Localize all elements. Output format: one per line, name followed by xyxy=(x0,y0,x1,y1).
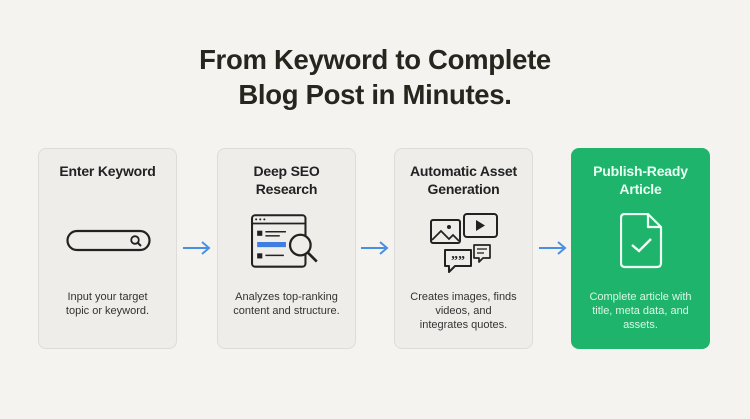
text xyxy=(589,291,692,331)
text xyxy=(66,291,149,317)
arrow 1 xyxy=(183,241,210,255)
text: integrates quotes. xyxy=(420,319,507,331)
panel: publish-ready article xyxy=(571,148,710,349)
heading: enter keyword: Enter Keyword xyxy=(59,163,156,179)
icon: document check xyxy=(620,213,662,268)
text: Analyzes top-ranking xyxy=(235,291,338,303)
heading xyxy=(593,163,688,197)
heading: Automatic Asset xyxy=(410,163,517,179)
text: videos, and xyxy=(435,305,492,317)
text xyxy=(233,291,340,317)
text: assets. xyxy=(623,319,658,331)
panel: automatic asset generation xyxy=(394,148,533,349)
text: topic or keyword. xyxy=(66,305,149,317)
title xyxy=(199,44,551,110)
text: content and structure. xyxy=(233,305,340,317)
arrow 2 xyxy=(361,241,388,255)
heading: Publish-Ready xyxy=(593,163,688,179)
heading: Article xyxy=(619,181,662,197)
icon: media assets: ” xyxy=(458,254,465,269)
title: Blog Post in Minutes. xyxy=(238,79,512,110)
text: Complete article with xyxy=(589,291,692,303)
heading: Deep SEO xyxy=(253,163,320,179)
icon: search bar xyxy=(66,230,151,252)
icon: browser with magnifier xyxy=(251,214,318,268)
text: title, meta data, and xyxy=(592,305,689,317)
icon: media assets: ” xyxy=(451,254,458,269)
heading xyxy=(410,163,517,197)
arrow 3 xyxy=(539,241,566,255)
heading: Generation xyxy=(428,181,499,197)
text: Input your target xyxy=(67,291,148,303)
heading xyxy=(253,163,320,197)
text: Creates images, finds xyxy=(410,291,517,303)
panel: deep seo research xyxy=(217,148,356,349)
panel: enter keyword xyxy=(38,148,177,349)
icon: media assets xyxy=(430,213,498,273)
heading: Research xyxy=(256,181,317,197)
title: From Keyword to Complete xyxy=(199,44,551,75)
text xyxy=(410,291,517,331)
